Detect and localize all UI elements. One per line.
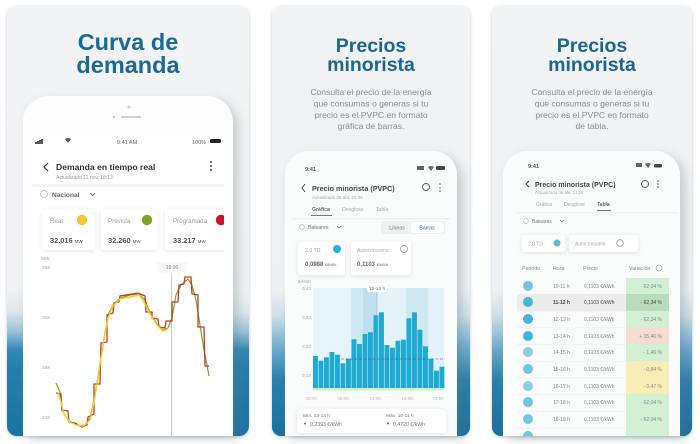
- phone: gráfica de barras: [285, 151, 457, 436]
- stat cards: [42, 209, 235, 250]
- bar chart: precio por hora: 0,13: [302, 373, 311, 378]
- card: prevista: 32.260 MW: [108, 236, 141, 245]
- row values: 0,1103 €/kWh: [584, 300, 615, 306]
- line chart: demanda: 28K: [42, 365, 51, 371]
- description: que consumas o generas si tu: [314, 98, 429, 108]
- line chart: demanda: 18:00: [166, 265, 178, 271]
- description: Consulta el precio de la energía: [310, 87, 432, 97]
- tabs: [312, 207, 389, 213]
- header: demanda en tiempo real: Actualizado 11 nov. 18:13: [56, 175, 113, 181]
- row values: - 62,34 %: [641, 300, 663, 306]
- description: [310, 87, 432, 131]
- bar chart: precio por hora: 0,23: [302, 344, 311, 349]
- table: precios por hora: [517, 265, 669, 444]
- phone: tabla: [503, 151, 680, 444]
- description: Consulta el precio de la energía: [531, 87, 653, 97]
- phone: demanda en tiempo real: [23, 96, 235, 436]
- row values: 15-16 h: [553, 367, 570, 373]
- row values: [553, 284, 663, 423]
- title: precios minorista: Precios: [336, 35, 406, 57]
- bar chart: precio por hora: 0,43: [302, 286, 311, 291]
- bar chart: precio por hora: 06:00: [337, 396, 349, 401]
- tabs: [536, 202, 610, 208]
- card: mín y máx: 0,4720 €/kWh: [393, 422, 425, 428]
- bar chart: precio por hora: €/kWh: [298, 279, 311, 284]
- bar chart: precio por hora: [298, 279, 445, 401]
- period markers: [523, 281, 533, 441]
- line chart: demanda: MW: [41, 256, 50, 262]
- card: programada: [164, 212, 224, 252]
- row values: - 1,46 %: [643, 350, 663, 356]
- row values: 0,1103 €/kWh: [584, 367, 615, 373]
- row values: - 0,84 %: [643, 367, 663, 373]
- header: [302, 183, 441, 200]
- row values: 11-12 h: [553, 300, 570, 306]
- description: de tabla.: [576, 121, 608, 131]
- status bar: [35, 138, 221, 146]
- line chart: demanda: [41, 256, 209, 436]
- table header: Hora: [553, 266, 564, 272]
- selector: nacional: Nacional: [52, 192, 80, 199]
- title: precios minorista: Precios: [557, 35, 627, 57]
- header: Actualizado 06 abr. 24:00: [312, 195, 363, 200]
- tabs: Gráfica: [536, 202, 552, 208]
- header: Actualizado 06 abr. 11:30: [535, 190, 584, 195]
- card: 2.0 TD: 2.0 TD: [305, 248, 321, 254]
- status bar: 100%: [192, 140, 206, 146]
- card: mín y máx: 0,2393 €/kWh: [310, 422, 342, 428]
- table header: Variación: [629, 266, 650, 272]
- selector: baleares: Baleares: [532, 219, 552, 225]
- card: autoconsumo: 0,1103 €/kWh: [357, 262, 388, 268]
- row values: 0,1103 €/kWh: [584, 317, 615, 323]
- header: demanda en tiempo real: Demanda en tiempo real: [56, 162, 155, 172]
- bar chart: precio por hora: 18:00: [401, 396, 413, 401]
- card: autoconsumo: [351, 242, 411, 275]
- panel: precios minorista, tabla: [492, 6, 692, 444]
- card: 2.0 TD: 0,0988 €/kWh: [305, 262, 336, 268]
- row values: - 62,04 %: [641, 284, 663, 290]
- card: autoconsumo: Autoconsumo: [357, 248, 389, 254]
- card: prevista: Prevista: [108, 218, 131, 225]
- tabs: Desglose: [564, 202, 585, 208]
- title: precios minorista: [327, 35, 415, 76]
- bar chart: precio por hora: 23:00: [432, 396, 444, 401]
- table header: [522, 265, 662, 272]
- card: prevista: [101, 209, 158, 250]
- title: precios minorista: [548, 35, 636, 76]
- row values: - 62,04 %: [641, 417, 663, 423]
- phone speaker: [113, 106, 141, 118]
- row values: 18-19 h: [553, 417, 570, 423]
- row values: 16-17 h: [553, 384, 570, 390]
- tabs: Tabla: [376, 207, 389, 213]
- card: real: [42, 209, 95, 250]
- header: [526, 180, 659, 195]
- bar chart: precio por hora: 0,33: [302, 315, 311, 320]
- card: 2.0 TD: [298, 242, 345, 275]
- status bar: [305, 166, 445, 173]
- line chart: demanda: 36K: [42, 265, 51, 271]
- selector: baleares: [300, 224, 341, 231]
- selector: baleares: [524, 218, 564, 225]
- card: 2.0 TD: 2.0 TD: [528, 242, 543, 248]
- row values: - 0,47 %: [643, 384, 663, 390]
- row values: 10-11 h: [553, 284, 570, 290]
- row values: 12-13 h: [553, 317, 570, 323]
- card: real: Real: [50, 218, 63, 225]
- status bar: 9:41 AM: [117, 140, 138, 146]
- card: mín y máx: [297, 409, 446, 433]
- status bar: 9:41: [305, 167, 316, 173]
- row values: 13-14 h: [553, 334, 570, 340]
- status bar: 9:41: [528, 164, 539, 170]
- row values: 14-15 h: [553, 350, 570, 356]
- selector: nacional: [40, 190, 95, 199]
- description: precio es el PVPC en formato: [314, 110, 428, 120]
- header: Precio minorista (PVPC): [535, 182, 616, 189]
- bar chart: precio por hora: 00:00: [305, 396, 317, 401]
- row values: 0,1103 €/kWh: [584, 350, 615, 356]
- tabs: Gráfica: [312, 207, 330, 213]
- row values: 0,1103 €/kWh: [584, 400, 615, 406]
- row values: 0,1103 €/kWh: [584, 284, 615, 290]
- row values: - 62,04 %: [641, 400, 663, 406]
- title: curva de demanda: [76, 29, 181, 78]
- toggle: líneas barras: Barras: [419, 226, 435, 232]
- toggle: líneas barras: [381, 221, 445, 234]
- card: autoconsumo: Autoconsumo: [575, 242, 606, 248]
- bar chart: precio por hora: 12-13 h: [369, 286, 385, 292]
- card: programada: 33.217 MW: [173, 236, 206, 245]
- card: programada: Programada: [173, 218, 208, 225]
- title: precios minorista: minorista: [327, 54, 415, 76]
- card: mín y máx: Máx. 10-11 h: [386, 413, 414, 419]
- row values: + 15,46 %: [639, 334, 663, 340]
- row values: 17-18 h: [553, 400, 570, 406]
- row values: 0,1103 €/kWh: [584, 334, 615, 340]
- title: curva de demanda: demanda: [76, 52, 181, 78]
- header: demanda en tiempo real: [44, 161, 212, 181]
- status bar: [528, 163, 662, 170]
- card: 2.0 TD: [522, 235, 565, 252]
- title: curva de demanda: Curva de: [78, 29, 178, 55]
- toggle: líneas barras: Líneas: [389, 226, 405, 232]
- description: precio es el PVPC en formato: [535, 110, 649, 120]
- row values: - 62,34 %: [641, 317, 663, 323]
- card: real: 32.016 MW: [50, 236, 83, 245]
- description: gráfica de barras.: [338, 121, 404, 131]
- selector: baleares: Baleares: [308, 225, 329, 231]
- row values: 0,1103 €/kWh: [584, 417, 615, 423]
- table header: Precio: [583, 266, 598, 272]
- description: [531, 87, 653, 131]
- line chart: demanda: 32K: [42, 315, 51, 321]
- card: mín y máx: Mín. 13-14 h: [303, 413, 330, 419]
- card: autoconsumo: [569, 235, 638, 252]
- tabs: Tabla: [597, 202, 610, 208]
- description: que consumas o generas si tu: [535, 98, 650, 108]
- panel: curva de demanda: [7, 6, 249, 436]
- tabs: Desglose: [342, 207, 364, 213]
- header: Precio minorista (PVPC): [312, 184, 395, 193]
- title: precios minorista: minorista: [548, 54, 636, 76]
- table header: Periodo: [522, 266, 540, 272]
- bar chart: precio por hora: 12:00: [369, 396, 381, 401]
- row values: 0,1103 €/kWh: [584, 384, 615, 390]
- line chart: demanda: 24K: [42, 415, 51, 421]
- panel: precios minorista, barras: [272, 6, 470, 436]
